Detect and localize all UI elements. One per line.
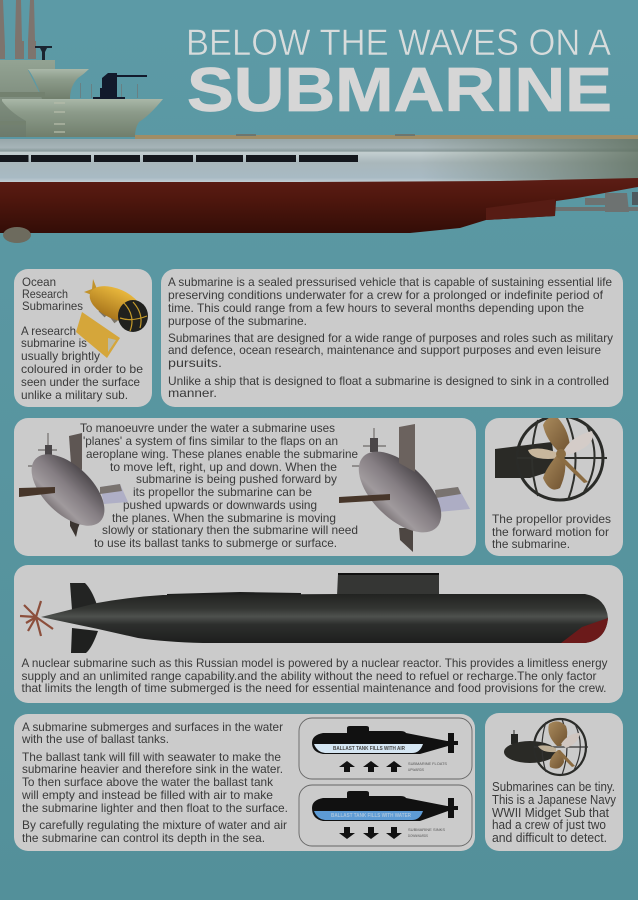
manoeuvring text: to move left, right, up and down. When the — [110, 460, 337, 474]
panel: propellor — [485, 416, 623, 556]
heading: Ocean — [22, 275, 56, 289]
propellor caption: the submarine. — [492, 537, 570, 551]
propellor caption — [492, 512, 611, 551]
nuclear text — [22, 656, 608, 695]
diagram: tank fills with water — [299, 785, 472, 846]
propellor caption: The propellor provides — [492, 512, 611, 526]
tail fins — [70, 583, 97, 610]
manoeuvring text — [80, 421, 358, 550]
midget sub caption: and difficult to detect. — [492, 831, 607, 845]
intro text: Submarines that are designed for a wide range of purposes and roles such as military — [168, 331, 613, 345]
panel: ballast tanks — [14, 714, 475, 851]
ballast text — [21, 720, 288, 845]
body text: A research — [21, 324, 76, 338]
ballast text: with the use of ballast tanks. — [21, 732, 169, 746]
intro text: A submarine is a sealed pressurised vehicle that is capable of sustaining essential life — [168, 275, 612, 289]
midget sub caption: This is a Japanese Navy — [492, 793, 617, 807]
railing posts — [80, 83, 138, 98]
icon: russian nuclear submarine — [20, 573, 608, 653]
deck gun — [93, 73, 147, 99]
manoeuvring text: to use its ballast tanks to submerge or surface. — [94, 536, 337, 550]
header submarine illustration — [0, 0, 638, 243]
hull slots — [0, 155, 358, 162]
ballast text: By carefully regulating the mixture of water and air — [22, 818, 287, 832]
ballast text: A submarine submerges and surfaces in the water — [22, 720, 283, 734]
midget sub caption: Submarines can be tiny. — [492, 780, 615, 794]
manoeuvring text: submarine is being pushed forward by — [136, 472, 337, 486]
ballast text: The ballast tank will fill with seawater to make the — [22, 750, 281, 764]
icon: propellor in cage — [495, 416, 607, 500]
arrows down — [339, 827, 402, 839]
diagram: tank fills with water: DOWNWARDS — [408, 833, 428, 838]
ballast text: submarine heavier and therefore sink in the water. — [22, 762, 283, 776]
diagram: tank fills with water: BALLAST TANK FILLS WITH WATER — [331, 813, 411, 819]
body text: coloured in order to be — [21, 362, 143, 376]
diagram: tank fills with air: BALLAST TANK FILLS WITH AIR — [333, 746, 405, 752]
deck — [135, 135, 638, 139]
body text: seen under the surface — [21, 375, 140, 389]
title — [186, 22, 612, 125]
midget sub caption: had a crew of just two — [492, 818, 606, 832]
bulge — [3, 227, 31, 243]
intro text: and defence, ocean research, maintenance and support purposes and even leisure — [168, 343, 601, 357]
sail — [337, 573, 439, 596]
silver upper hull — [0, 139, 638, 182]
intro text: Unlike a ship that is designed to float a submarine is designed to sink in a controlled — [168, 374, 609, 388]
red lower hull — [0, 178, 638, 233]
diagram: tank fills with air — [299, 718, 472, 779]
midget sub caption: WWII Midget Sub that — [492, 806, 609, 820]
body text: submarine is — [21, 336, 87, 350]
diagram: tank fills with air: UPWARDS — [408, 767, 424, 772]
manoeuvring text: the planes. When the submarine is moving — [112, 511, 336, 525]
intro text: preserving conditions underwater for a crew for a prolonged or indefinite period of — [168, 288, 604, 302]
conning tower — [0, 60, 163, 137]
panel: midget submarine — [485, 713, 623, 851]
nuclear text: that limits the length of time submerged is the need for essential maintenance and food provisions for the crew. — [22, 681, 606, 695]
title line one: BELOW THE WAVES ON A — [186, 22, 611, 63]
icon: yellow research submarine — [76, 279, 148, 358]
manoeuvring text: its propellor the submarine can be — [133, 485, 312, 499]
icon: japanese midget submarine — [504, 719, 588, 775]
manoeuvring text: slowly or stationary then the submarine will need — [102, 523, 358, 537]
arrows up — [339, 761, 402, 772]
manoeuvring text: aeroplane wing. These planes enable the submarine — [86, 447, 358, 461]
icon: submarine planes right — [339, 424, 470, 552]
diagram: tank fills with water: SUBMARINE SINKS — [408, 827, 445, 832]
ballast text: the submarine lighter and then float to the surface. — [22, 801, 288, 815]
periscope — [35, 46, 52, 60]
intro text: purpose of the submarine. — [168, 314, 307, 328]
midget sub caption — [492, 780, 617, 845]
red nose — [561, 618, 608, 643]
panel: nuclear submarine — [14, 565, 623, 703]
ballast text: To then surface above the water the ballast tank — [22, 775, 273, 789]
nuclear text: A nuclear submarine such as this Russian model is powered by a nuclear reactor. This provides a limitless energy — [22, 656, 608, 670]
body text: unlike a military sub. — [21, 388, 128, 402]
manoeuvring text: 'planes' a system of fins similar to the flaps on an — [83, 434, 338, 448]
intro text: manner. — [168, 386, 217, 400]
manoeuvring text: pushed upwards or downwards using — [123, 498, 317, 512]
ballast text: the submarine can control its depth in the sea. — [22, 831, 265, 845]
body text: usually brightly — [21, 349, 100, 363]
intro text: pursuits. — [168, 356, 222, 370]
masts — [0, 0, 36, 59]
intro text: time. This could range from a few hours to several months depending upon the — [168, 301, 584, 315]
heading — [22, 275, 83, 313]
diagram: tank fills with air: SUBMARINE FLOATS — [408, 761, 447, 766]
title line two: SUBMARINE — [187, 56, 612, 125]
body text — [21, 324, 143, 402]
nuclear text: supply and an unlimited range capability.and the ability without the need to refuel or recharge.The only factor — [22, 669, 597, 683]
heading: Submarines — [22, 299, 83, 313]
icon: submarine planes left — [19, 433, 128, 539]
propellor caption: the forward motion for — [492, 525, 609, 539]
heading: Research — [22, 287, 68, 301]
propeller — [20, 601, 53, 636]
intro text — [168, 275, 613, 400]
keel fittings — [555, 193, 638, 212]
panel: introduction — [161, 269, 623, 407]
panel: ocean research submarines — [14, 269, 152, 407]
ladder rungs — [54, 103, 65, 132]
hull — [41, 594, 608, 643]
manoeuvring text: To manoeuvre under the water a submarine uses — [80, 421, 335, 435]
ballast text: will empty and instead be filled with air to make — [21, 788, 273, 802]
panel: planes and manoeuvring — [14, 418, 476, 556]
